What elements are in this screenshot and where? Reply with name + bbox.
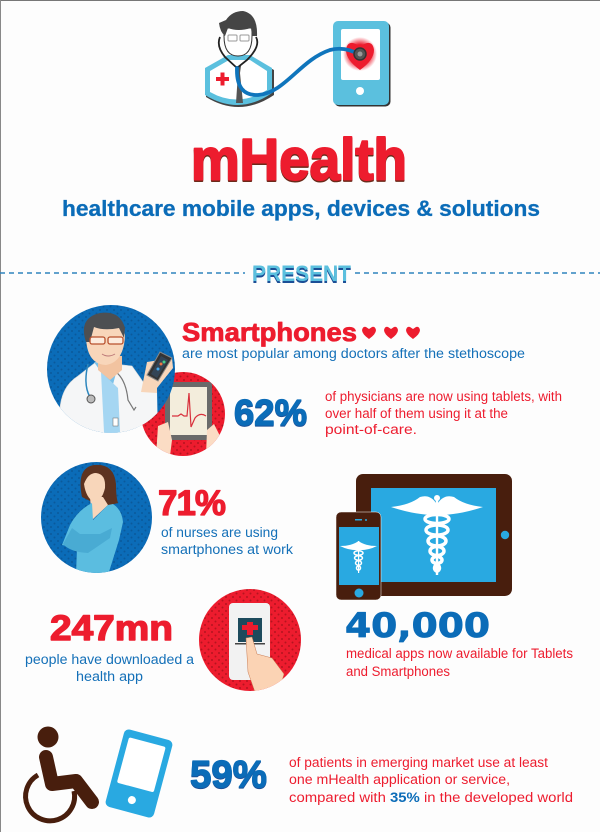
panel: hand tapping phone circle [199, 589, 301, 695]
text: patients fact: compared with 35% in the developed world [289, 790, 573, 805]
stat: 62%: 62% [234, 392, 307, 433]
text: apps fact [346, 646, 573, 679]
text: tablets fact [325, 389, 562, 437]
tablet [356, 474, 512, 596]
subtitle: healthcare mobile apps, devices & solutions [62, 196, 540, 221]
stat: 62%: 62% [234, 393, 307, 434]
title: mHealth [191, 129, 407, 194]
stethoscope tube [237, 49, 360, 95]
text: smartphones caption: are most popular among doctors after the stethoscope [182, 346, 525, 361]
section heading: present: PRESENT [252, 263, 352, 288]
text: downloads fact: people have downloaded a [25, 652, 195, 667]
icon: phone with heart [333, 21, 390, 106]
text: tablets fact: point-of-care. [325, 422, 417, 437]
text: apps fact: medical apps now available for Tablets [346, 646, 573, 661]
text: patients fact [289, 755, 573, 805]
text: nurses fact: of nurses are using [161, 525, 278, 540]
panel: tablet illustration circle [141, 372, 225, 456]
panel: nurse illustration circle [41, 462, 152, 575]
icon: tablet and phone with caduceus [336, 474, 512, 600]
text: downloads fact: health app [76, 669, 143, 684]
icon: doctor [205, 11, 274, 107]
section heading: present: PRESENT [252, 261, 352, 286]
panel: doctor illustration circle [47, 305, 175, 440]
heading: smartphones [182, 317, 420, 347]
text: tablets fact: over half of them using it at the [325, 406, 508, 421]
stat: 59%: 59% [190, 754, 267, 796]
title: mHealth [191, 128, 407, 192]
text: patients fact: of patients in emerging market use at least [289, 755, 548, 770]
icon: tilted tablet [104, 728, 174, 819]
text: downloads fact [25, 652, 195, 684]
text: nurses fact [161, 525, 293, 557]
phone [336, 512, 381, 600]
icon: hearts [362, 327, 420, 339]
stat: 247mn: 247mn [50, 609, 173, 648]
text: apps fact: and Smartphones [346, 664, 450, 679]
icon: doctor with stethoscope connected to phone [205, 11, 390, 107]
text: tablets fact: of physicians are now using tablets, with [325, 389, 562, 404]
stat: 71%: 71% [158, 484, 226, 523]
heading: smartphones: Smartphones [182, 317, 357, 347]
text: patients fact: one mHealth application or service, [289, 772, 510, 787]
icon: wheelchair user [26, 726, 92, 821]
stat: 40,000: 40,000 [345, 606, 490, 646]
stat: 59%: 59% [190, 755, 267, 797]
text: nurses fact: smartphones at work [161, 542, 293, 557]
